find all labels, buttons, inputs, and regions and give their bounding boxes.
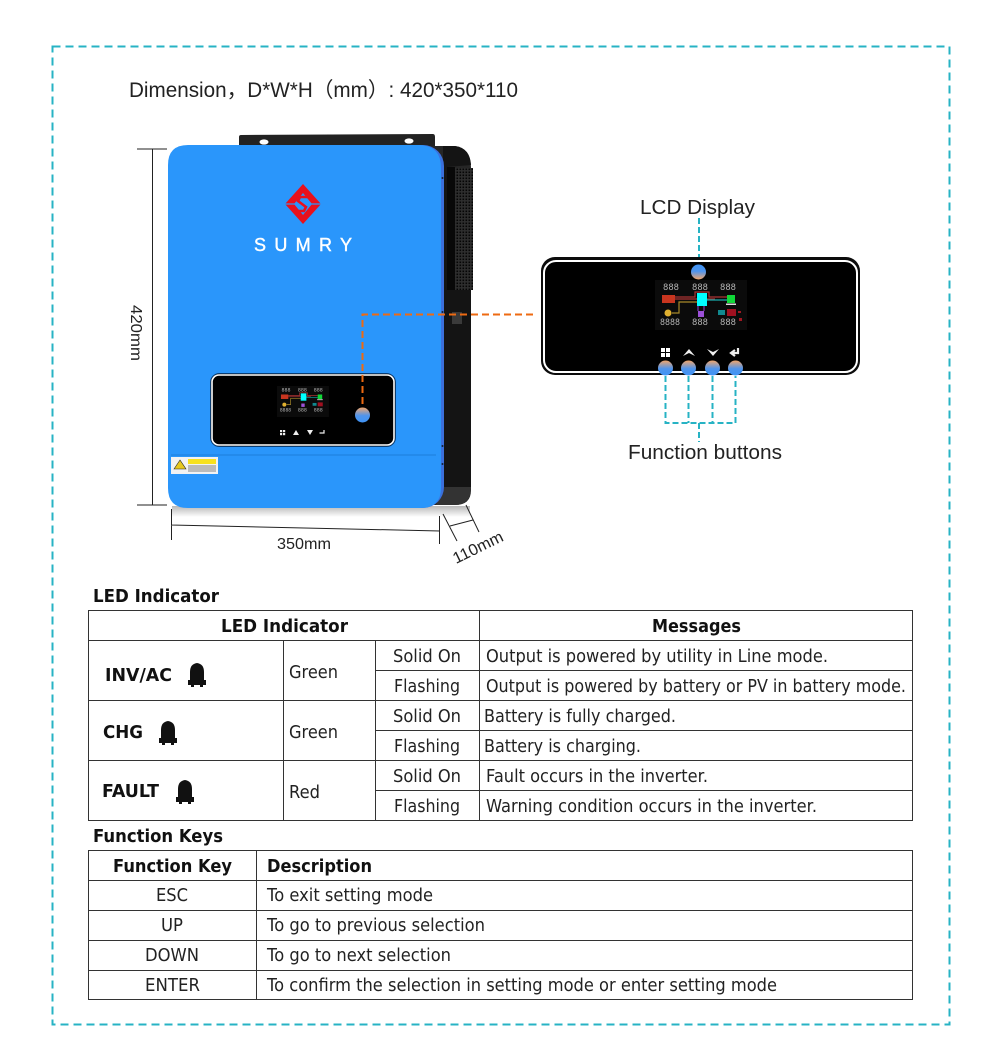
LED indicator heading: LED Indicator <box>93 586 219 607</box>
LCD marker dot <box>691 264 706 280</box>
device LCD screen: 888 <box>298 406 307 413</box>
FAULT row <box>102 766 817 817</box>
LCD bottom readouts <box>660 318 736 329</box>
CHG row <box>103 706 676 757</box>
DOWN row: DOWN <box>145 945 199 966</box>
INV/AC row: INV/AC <box>105 665 172 686</box>
depth dimension: 110mm <box>450 529 506 568</box>
depth dimension <box>443 505 506 568</box>
LED table header: LED Indicator <box>221 616 348 637</box>
LCD battery icon <box>698 306 704 317</box>
LCD grid icon <box>664 310 672 316</box>
function buttons label: Function buttons <box>628 442 782 464</box>
function button leader lines <box>666 376 736 442</box>
SUMRY logo <box>254 184 352 255</box>
FAULT row: Red <box>289 782 320 803</box>
device LCD screen: 8888 <box>280 406 292 413</box>
CHG row: Battery is fully charged. <box>484 706 676 727</box>
LCD warning icons <box>718 309 742 321</box>
floor shadow <box>172 506 470 517</box>
device LCD screen: 888 <box>282 387 291 394</box>
LED table grid <box>88 610 912 820</box>
width dimension: 350mm <box>277 536 331 553</box>
ESC row: ESC <box>156 885 188 906</box>
device panel buttons <box>280 430 324 435</box>
enter button icon <box>731 348 738 356</box>
DOWN row <box>145 945 451 966</box>
inverter side body <box>430 146 473 505</box>
function keys heading: Function Keys <box>93 826 223 847</box>
LCD load icon <box>726 295 736 305</box>
CHG row: Battery is charging. <box>484 736 641 757</box>
dimension heading: Dimension，D*W*H（mm）: 420*350*110 <box>129 79 518 102</box>
height dimension <box>127 149 167 505</box>
inverter front cover <box>168 145 444 508</box>
INV/AC row: Solid On <box>393 646 461 667</box>
FAULT row: Warning condition occurs in the inverter. <box>486 796 817 817</box>
menu button icon <box>661 348 670 357</box>
UP row: To go to previous selection <box>266 915 485 936</box>
LCD top readouts <box>663 283 736 294</box>
LCD inverter icon <box>697 293 707 306</box>
device LCD screen: 888 <box>314 406 323 413</box>
FAULT row: Flashing <box>394 796 460 817</box>
caution sticker <box>171 457 218 474</box>
device marker dot <box>355 408 370 422</box>
function table header: Function Key <box>113 856 232 877</box>
height dimension: 420mm <box>127 305 144 361</box>
INV/AC row <box>105 646 906 697</box>
INV/AC row: Output is powered by utility in Line mode. <box>486 646 828 667</box>
LCD bottom readouts: 888 <box>692 318 708 329</box>
SUMRY logo: SUMRY <box>254 235 352 255</box>
orange leader line <box>362 314 533 404</box>
down button icon <box>707 349 719 356</box>
inverter product illustration <box>168 134 473 517</box>
LCD top readouts: 888 <box>663 283 679 294</box>
CHG row: Flashing <box>394 736 460 757</box>
up button icon <box>683 349 695 356</box>
icon: CHG LED <box>159 721 177 745</box>
CHG row: Green <box>289 722 338 743</box>
FAULT row: FAULT <box>102 781 160 802</box>
LCD display label: LCD Display <box>640 197 755 219</box>
device LCD screen: 888 <box>314 387 323 394</box>
enlarged control panel <box>541 257 860 375</box>
button marker dots <box>658 360 743 376</box>
UP row <box>161 915 485 936</box>
icon: INV/AC LED <box>188 663 206 687</box>
INV/AC row: Output is powered by battery or PV in battery mode. <box>486 676 906 697</box>
function keys table <box>88 850 912 1000</box>
INV/AC row: Green <box>289 662 338 683</box>
ESC row <box>156 885 433 906</box>
LCD bottom readouts: 888 <box>720 318 736 329</box>
LED table header: Messages <box>652 616 741 637</box>
width dimension <box>171 509 440 553</box>
LCD top readouts: 888 <box>692 283 708 294</box>
LED indicator table <box>88 610 912 820</box>
UP row: UP <box>161 915 183 936</box>
CHG row: Solid On <box>393 706 461 727</box>
LCD leader line <box>698 218 700 266</box>
LCD PV icon <box>662 295 675 303</box>
device control panel <box>210 374 396 446</box>
ESC row: To exit setting mode <box>266 885 433 906</box>
function table header: Description <box>267 856 372 877</box>
INV/AC row: Flashing <box>394 676 460 697</box>
mounting bracket <box>239 134 435 150</box>
enlarged LCD screen <box>655 280 747 330</box>
LCD top readouts: 888 <box>720 283 736 294</box>
LCD bottom readouts: 8888 <box>660 318 680 329</box>
icon: FAULT LED <box>176 780 194 804</box>
device LCD screen: 888 <box>298 387 307 394</box>
function table grid <box>88 850 912 1000</box>
CHG row: CHG <box>103 722 143 743</box>
device LCD screen <box>277 386 329 417</box>
function table header <box>113 856 372 877</box>
FAULT row: Fault occurs in the inverter. <box>486 766 708 787</box>
ENTER row: To confirm the selection in setting mode or enter setting mode <box>266 975 777 996</box>
ENTER row: ENTER <box>145 975 200 996</box>
LED table header <box>221 616 741 637</box>
FAULT row: Solid On <box>393 766 461 787</box>
DOWN row: To go to next selection <box>266 945 451 966</box>
